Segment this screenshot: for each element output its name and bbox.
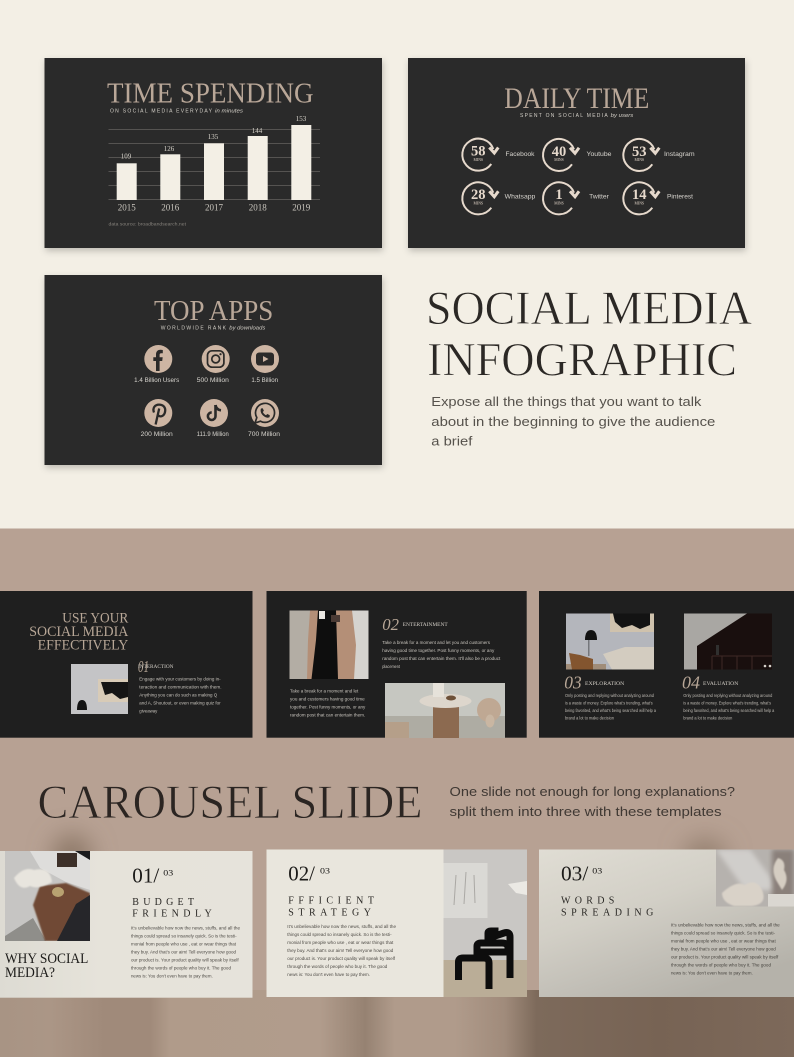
slide heading: why social media: MEDIA?: [5, 965, 55, 981]
slide: exploration and evaluation: [539, 591, 794, 738]
year axis labels: 2017: [205, 202, 224, 212]
heading: carousel slide: CAROUSEL SLIDE: [38, 776, 422, 829]
photo: wall art and lamp: [71, 664, 128, 714]
body text right: Only posting and replying without analyzing around: [683, 693, 773, 698]
stat: instagram 53: [623, 139, 695, 171]
app download labels: 700 Million: [248, 432, 280, 438]
body text: giveaway: [139, 708, 158, 714]
stat: twitter 1: MINS: [554, 201, 564, 205]
bar chart: [117, 125, 311, 200]
panel: top apps: [44, 275, 382, 465]
stat: twitter 1: Twitter: [589, 195, 609, 201]
title: social media infographic: [426, 282, 752, 386]
stat: pinterest 14: 14: [632, 187, 647, 203]
photo: white sculpture: [716, 850, 794, 907]
body text right: being favorited, and what's being searched will help a: [683, 708, 775, 713]
slide subheading: words spreading: SPREADING: [561, 907, 653, 918]
subtitle: top apps: WORLDWIDE RANK: [161, 326, 227, 332]
stat: whatsapp 28: 28: [471, 187, 486, 203]
body text: news is: You don't even have to pay them.: [671, 970, 753, 976]
heading: time spending: TIME SPENDING: [107, 78, 314, 110]
section label: evaluation: EVALUATION: [703, 681, 738, 687]
stat: instagram 53: MINS: [635, 158, 644, 162]
slide subheading: efficient strategy: STRATEGY: [288, 907, 371, 918]
year axis labels: [118, 202, 311, 212]
slide heading: USE YOUR: [62, 610, 128, 626]
body text: monial from people who use , eat or wear things that: [287, 940, 394, 945]
body text left: brand a lot to make decision: [565, 716, 614, 720]
stat: youtube 40: [543, 139, 612, 171]
app download labels: [134, 378, 280, 438]
body text: our product is. Your product quality will speak by itself: [131, 958, 239, 962]
cream background section: [0, 0, 794, 529]
slide number 01 of 03: [132, 863, 173, 887]
body text: teraction and communication with them.: [139, 684, 222, 690]
body text bottom: random post that can entertain them.: [290, 712, 365, 718]
stat: instagram 53: 53: [632, 144, 647, 160]
body text bottom: Take a break for a moment and let: [290, 688, 359, 694]
body text: things could spread so insanely quick. So is the testi-: [287, 932, 392, 937]
slide number 02 of 03: [288, 862, 330, 886]
body text bottom: you and customers having good time: [290, 696, 365, 702]
bar value labels: 153: [296, 115, 307, 123]
intro text: Expose all the things that you want to talk: [431, 394, 702, 409]
slide subheading: efficient strategy: [288, 895, 374, 918]
carousel description: [450, 784, 735, 819]
section label: exploration: EXPLORATION: [585, 681, 624, 687]
slide heading: why social media: WHY SOCIAL: [5, 951, 88, 967]
section label: entertainment: ENTERTAINMENT: [403, 622, 448, 628]
subtitle: time spending: in minutes: [215, 109, 243, 115]
panel: time spending: [44, 58, 382, 248]
icon: youtube: [251, 345, 279, 373]
slide: words spreading: [539, 850, 794, 997]
app download labels: 1.4 Billion Users: [134, 378, 179, 384]
stat: facebook 58: MINS: [474, 158, 483, 162]
year axis labels: 2015: [118, 202, 136, 212]
intro text: [431, 394, 715, 449]
icon: tiktok: [200, 399, 228, 427]
heading: top apps: TOP APPS: [154, 295, 273, 327]
body text left: being favorited, and what's being searched will help a: [565, 708, 656, 713]
app download labels: 1.5 Billion: [251, 378, 278, 384]
icon: instagram: [202, 345, 230, 373]
stat: twitter 1: 1: [555, 187, 563, 203]
year axis labels: 2019: [292, 202, 311, 212]
body text: our product is. Your product quality will speak by itself: [671, 954, 779, 960]
slide subheading: budget friendly: FRIENDLY: [132, 909, 212, 920]
body text: Anything you can do such as making Q: [139, 692, 218, 698]
body text right: is a waste of money. Explore what's trending, what's: [683, 700, 772, 706]
stat: whatsapp 28: MINS: [474, 201, 483, 205]
slide heading: SOCIAL MEDIA: [29, 624, 128, 640]
heading: daily time: DAILY TIME: [504, 82, 649, 115]
body text top: random post that can entertain them. It'll also be a product: [382, 656, 501, 661]
photo: person in coat: [290, 610, 368, 679]
photo: black chair: [444, 850, 527, 997]
subtitle: top apps: by downloads: [229, 326, 266, 332]
slide: efficient strategy: [266, 850, 527, 997]
app download labels: 200 Million: [141, 432, 173, 438]
section label: interaction: INTERACTION: [138, 664, 174, 670]
bar value labels: 135: [208, 133, 219, 141]
bar value labels: 109: [121, 152, 132, 160]
section number 02: 02: [382, 615, 399, 634]
slide number 03 of 03: 03/: [561, 862, 588, 886]
stat: youtube 40: 40: [552, 144, 566, 160]
slide subheading: budget friendly: BUDGET: [132, 897, 194, 908]
body text: through the words of people who buy it. The good: [671, 962, 771, 968]
body text: Engage with your customers by doing in-: [139, 676, 221, 682]
body text left: Only posting and replying without analyzing around: [565, 693, 654, 698]
year axis labels: 2018: [249, 202, 267, 212]
slide heading: why social media: [5, 951, 88, 981]
body text: through the words of people who buy it. The good: [287, 964, 388, 969]
app download labels: 500 Million: [197, 378, 229, 384]
title: social media infographic: SOCIAL MEDIA: [426, 282, 752, 335]
subtitle: daily time: SPENT ON SOCIAL MEDIA: [520, 113, 608, 119]
body text: monial from people who use , eat or wear things that: [671, 938, 776, 944]
slide number 02 of 03: 02/: [288, 862, 315, 886]
slide: use your social media: [0, 591, 252, 738]
photo: side table: [385, 683, 505, 738]
year axis labels: 2016: [161, 202, 180, 212]
slide subheading: efficient strategy: FFFICIENT: [288, 895, 374, 906]
photo: hand with ring: [5, 851, 90, 941]
carousel description: One slide not enough for long explanations?: [450, 784, 735, 799]
photo: dark shelf room: [684, 614, 772, 670]
slide number 03 of 03: 03: [592, 867, 602, 876]
body text right: [683, 693, 775, 720]
section number 01: 01: [138, 657, 149, 676]
section number 03: 03: [564, 672, 582, 692]
carousel description: split them into three with these templates: [450, 804, 722, 819]
body text: through the words of people who buy it. The good: [131, 966, 231, 970]
body text left: [565, 693, 656, 720]
panel: daily time: [408, 58, 745, 248]
stat: youtube 40: MINS: [554, 158, 564, 162]
icon: whatsapp: [251, 399, 279, 427]
stat: instagram 53: Instagram: [664, 152, 695, 158]
subtitle: daily time: by users: [611, 113, 634, 119]
body text: It's unbelievable how now the news, stuffs, and all the: [131, 926, 240, 930]
slide number 03 of 03: [561, 862, 602, 886]
body text top: Take a break for a moment and let you and customers: [382, 640, 491, 645]
bar value labels: 144: [252, 127, 263, 135]
body text right: brand a lot to make decision: [683, 716, 733, 720]
subtitle: top apps: [161, 326, 266, 332]
title: social media infographic: INFOGRAPHIC: [427, 334, 737, 386]
body text: It's unbelievable how now the news, stuffs, and all the: [287, 924, 396, 929]
body text: they buy. And that's our aim! Tell everyone how good: [131, 950, 236, 954]
stat: pinterest 14: MINS: [635, 201, 644, 205]
body text: they buy. And that's our aim! Tell everyone how good: [287, 948, 394, 953]
slide subheading: budget friendly: [132, 897, 212, 920]
body text top: [382, 640, 501, 669]
body text: things could spread so insanely quick. So is the testi-: [131, 934, 237, 938]
slide heading: EFFECTIVELY: [38, 638, 128, 654]
slide subheading: words spreading: [561, 895, 653, 918]
taupe background section: [0, 528, 794, 1057]
stat: whatsapp 28: Whatsapp: [505, 195, 536, 201]
stat: pinterest 14: [623, 182, 693, 214]
body text: news is: You don't even have to pay them.: [287, 972, 370, 977]
body text: news is: You don't even have to pay them.: [131, 974, 213, 978]
body text bottom: together. Post funny moments, or any: [290, 704, 366, 710]
body text: and A, Shoutout, or even making quiz for: [139, 700, 221, 706]
slide number 01 of 03: 01/: [132, 863, 159, 887]
photo: bedroom: [566, 614, 654, 670]
subtitle: time spending: ON SOCIAL MEDIA EVERYDAY: [110, 109, 213, 115]
body text: monial from people who use , eat or wear things that: [131, 942, 237, 946]
slide heading: [29, 610, 128, 654]
body text: [287, 924, 396, 977]
body text: [671, 922, 780, 976]
slide: entertainment: [266, 591, 527, 738]
stat: pinterest 14: Pinterest: [667, 195, 693, 201]
body text: things could spread so insanely quick. So is the testi-: [671, 930, 775, 936]
slide number 02 of 03: 03: [320, 867, 330, 876]
stat: facebook 58: [462, 139, 536, 171]
app download labels: 111.9 Million: [197, 432, 229, 438]
body text: It's unbelievable how now the news, stuffs, and all the: [671, 922, 780, 928]
body text left: is a waste of money. Explore what's trending, what's: [565, 700, 653, 706]
stat: whatsapp 28: [462, 182, 536, 214]
slide number 01 of 03: 03: [163, 869, 173, 878]
stat: facebook 58: 58: [471, 144, 486, 160]
icon: pinterest: [144, 399, 172, 427]
stat: twitter 1: [543, 182, 609, 214]
body text: they buy. And that's our aim! Tell everyone how good: [671, 946, 776, 952]
body text: [139, 676, 222, 714]
body text top: placement: [382, 664, 401, 669]
slide subheading: words spreading: WORDS: [561, 895, 614, 906]
body text top: having good time together. Post funny moments, or any: [382, 648, 495, 653]
intro text: a brief: [431, 434, 473, 449]
slide: budget friendly: [0, 851, 252, 998]
intro text: about in the beginning to give the audience: [431, 414, 715, 429]
section number 04: 04: [682, 672, 700, 692]
icon: facebook: [144, 345, 172, 373]
body text: [131, 926, 240, 978]
bar value labels: 126: [164, 145, 175, 153]
body text bottom: [290, 688, 366, 718]
stat: facebook 58: Facebook: [505, 152, 536, 158]
data source note: data source: broadbandsearch.net: [108, 222, 187, 227]
stat: youtube 40: Youtube: [586, 152, 612, 158]
bar value labels: [121, 115, 307, 160]
body text: our product is. Your product quality will speak by itself: [287, 956, 396, 961]
